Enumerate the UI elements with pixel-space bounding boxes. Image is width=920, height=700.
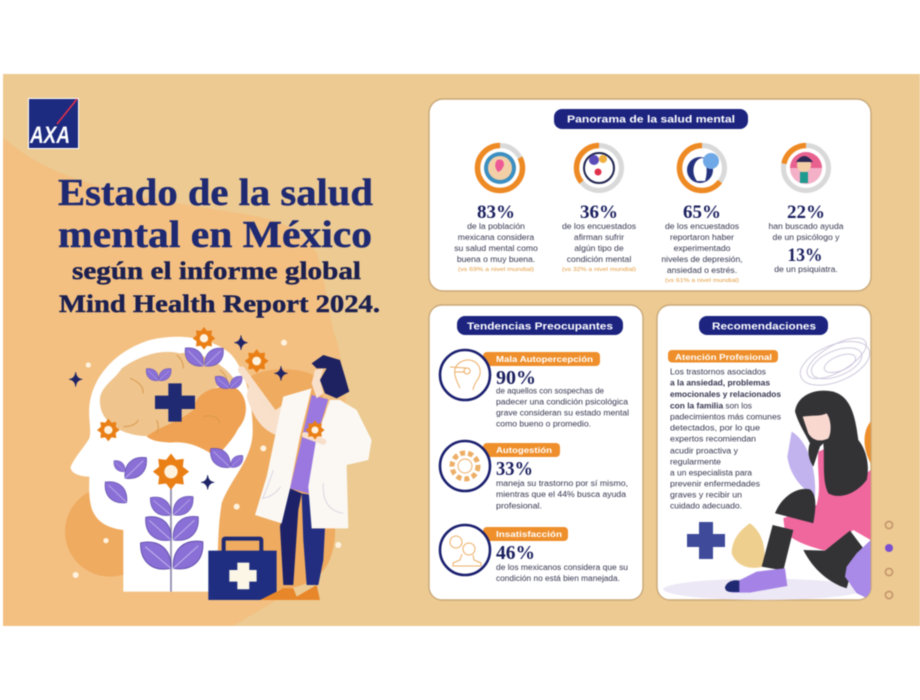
stat: 83%: 83% <box>477 202 515 223</box>
stat: 65% <box>661 146 743 284</box>
recommendation text: cuidado adecuado. <box>670 502 742 510</box>
doctor <box>242 355 372 600</box>
recommendation text: padecimientos más comunes <box>670 412 781 422</box>
first aid kit <box>208 539 277 600</box>
trend: Mala Autopercepción: como bueno o promedio. <box>496 420 591 428</box>
icon: cross <box>687 522 725 559</box>
label pill: Atención Profesional <box>675 353 772 362</box>
stat: 36%: condición mental <box>567 254 631 264</box>
stat: 36%: afirman sufrir <box>574 232 624 242</box>
stat: 22% and 13% <box>768 146 844 274</box>
stat: 83%: buena o muy buena. <box>457 254 535 264</box>
title: mental en México <box>58 214 372 256</box>
stat: 22% and 13%: 22% <box>787 202 825 223</box>
recommendation text: expertos recomiendan <box>670 434 756 444</box>
recommendation text: emocionales y relacionados <box>670 390 782 399</box>
stat: 22% and 13%: de un psicólogo y <box>773 232 840 242</box>
stat: 83%: (vs 69% a nivel mundial) <box>458 267 534 273</box>
stat: 36%: de los encuestados <box>562 221 636 231</box>
trend: Insatisfacción: condición no está bien manejada. <box>496 574 620 583</box>
title: según el informe global <box>72 258 361 285</box>
stat: 83% <box>454 146 538 273</box>
stat: 83%: de la población <box>467 221 525 231</box>
recommendation text: graves y recibir un <box>670 490 742 500</box>
logo: AXA <box>28 98 79 149</box>
stat: 36%: 36% <box>580 202 618 223</box>
trend: Mala Autopercepción <box>440 350 629 428</box>
stat: 36%: algún tipo de <box>574 243 624 253</box>
stat: 65%: reportaron haber <box>670 232 734 242</box>
trend: Autogestión: 33% <box>496 458 533 480</box>
pagination dots <box>885 521 893 599</box>
stat: 22% and 13%: de un psiquiatra. <box>774 264 838 274</box>
trend: Autogestión: profesional. <box>496 502 542 510</box>
stat: 83%: mexicana considera <box>458 232 534 242</box>
trend: Insatisfacción: 46% <box>496 542 535 564</box>
label pill <box>668 350 778 362</box>
stat: 22% and 13%: 13% <box>788 245 822 266</box>
trend: Insatisfacción: de los mexicanos considera que su <box>496 563 628 572</box>
recommendation text <box>670 368 782 510</box>
background panel <box>3 74 920 626</box>
heading pill <box>699 316 828 335</box>
stat: 65%: ansiedad o estrés. <box>667 265 737 275</box>
recommendation text: regularmente <box>670 458 722 466</box>
recommendation text: a un especialista para <box>670 468 753 478</box>
heading pill: Panorama de la salud mental <box>567 114 735 126</box>
recommendation text: prevenir enfermedades <box>670 480 760 488</box>
flowers <box>97 327 269 490</box>
panel: Tendencias Preocupantes <box>429 305 643 600</box>
trend: Mala Autopercepción: de aquellos con sospechas de <box>496 386 605 396</box>
illustration: head, brain and doctor <box>65 327 372 600</box>
brain <box>100 352 246 457</box>
trend: Autogestión <box>440 441 628 510</box>
plant with leaves <box>99 343 246 592</box>
recommendation text: Los trastornos asociados <box>670 368 766 376</box>
panel: Panorama de la salud mental <box>429 99 871 291</box>
sparkles <box>69 335 341 578</box>
title: Estado de la salud <box>58 172 373 214</box>
title: Mind Health Report 2024. <box>59 291 380 318</box>
trend: Insatisfacción <box>440 525 628 583</box>
heading pill: Recomendaciones <box>712 320 816 332</box>
trend: Insatisfacción: Insatisfacción <box>496 530 562 539</box>
trend: Mala Autopercepción: grave consideran su estado mental <box>496 408 629 418</box>
stat: 36% <box>562 146 636 273</box>
stat: 65%: de los encuestados <box>665 221 739 231</box>
recommendation text: con la familia son los <box>670 402 752 410</box>
brain cross <box>155 383 195 422</box>
illustration: seated girl <box>663 330 876 600</box>
trend: Mala Autopercepción: padecer una condición psicológica <box>496 398 629 406</box>
stat: 65%: (vs 61% a nivel mundial) <box>665 278 739 284</box>
trend: Autogestión: Autogestión <box>496 446 552 455</box>
trend: Mala Autopercepción: 90% <box>496 367 536 389</box>
stat: 36%: (vs 32% a nivel mundial) <box>562 267 636 273</box>
orange background blobs <box>65 369 335 590</box>
stat: 83%: su salud mental como <box>454 243 538 253</box>
stat: 65%: niveles de depresión, <box>661 254 743 264</box>
trend: Autogestión: maneja su trastorno por sí mismo, <box>496 479 628 488</box>
heading pill <box>554 109 748 129</box>
stat: 22% and 13%: han buscado ayuda <box>768 221 844 231</box>
title <box>58 172 380 318</box>
heading pill: Tendencias Preocupantes <box>467 320 613 332</box>
panel: Recomendaciones <box>657 305 876 600</box>
trend: Autogestión: mientras que el 44% busca ayuda <box>496 490 627 499</box>
recommendation text: a la ansiedad, problemas <box>670 378 771 388</box>
heading pill <box>457 316 623 335</box>
head silhouette <box>71 337 253 592</box>
trend: Mala Autopercepción: Mala Autopercepción <box>496 355 593 364</box>
recommendation text: detectados, por lo que <box>670 424 761 432</box>
stat: 65%: experimentado <box>674 243 731 253</box>
stat: 65%: 65% <box>683 202 721 223</box>
recommendation text: acudir proactiva y <box>670 446 738 456</box>
logo: AXA: AXA <box>29 122 70 149</box>
